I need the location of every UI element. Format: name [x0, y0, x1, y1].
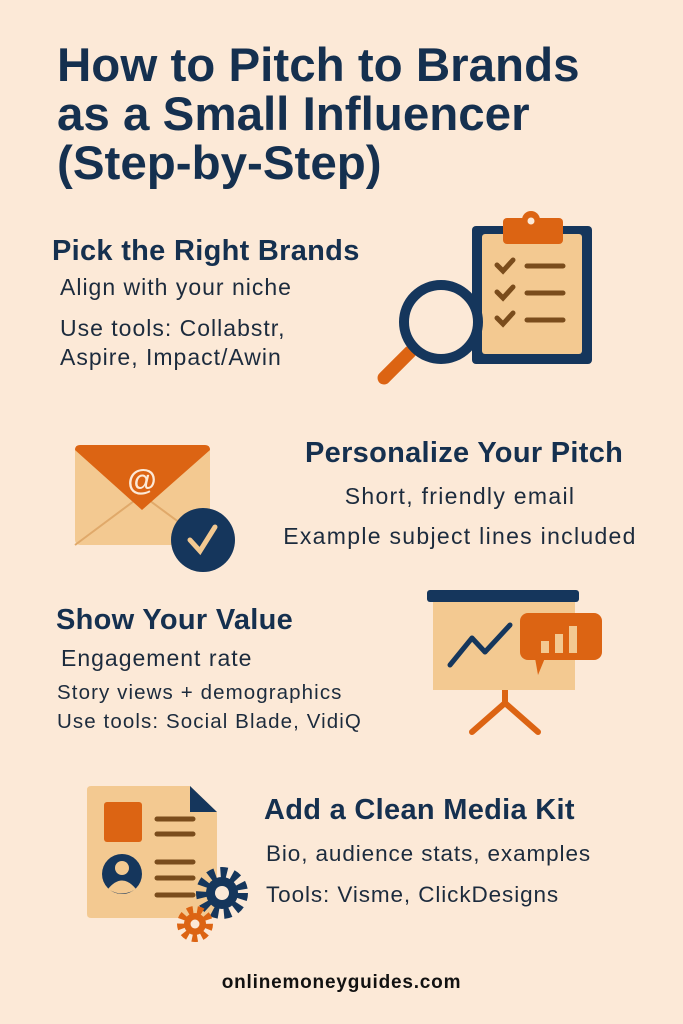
heading: pick brands: Pick the Right Brands — [52, 235, 360, 267]
text: media kit: Bio, audience stats, examples — [266, 841, 591, 866]
text: media kit — [266, 841, 591, 907]
heading: personalize: Personalize Your Pitch — [305, 437, 623, 469]
text: show value: Story views + demographics — [57, 681, 343, 704]
title: as a Small Influencer — [57, 88, 530, 141]
text: personalize: Short, friendly email — [345, 483, 575, 509]
text: pick brands — [60, 274, 292, 370]
icon: envelope with check — [75, 445, 235, 572]
footer: onlinemoneyguides.com — [222, 972, 461, 993]
icon: presentation board — [427, 590, 602, 732]
text: pick brands: Align with your niche Use tools: Collabstr, — [60, 274, 292, 341]
icon: clipboard and magnifier — [384, 211, 592, 378]
text: pick brands: Aspire, Impact/Awin — [60, 344, 282, 370]
title — [57, 39, 580, 190]
text: personalize: Example subject lines included — [283, 523, 637, 549]
heading: show value: Show Your Value — [56, 604, 293, 636]
text: personalize — [283, 483, 637, 549]
text: show value: Engagement rate — [61, 645, 252, 671]
icon: envelope with check: @ — [127, 464, 157, 497]
heading: media kit: Add a Clean Media Kit — [264, 794, 575, 826]
text: show value: Use tools: Social Blade, VidiQ — [57, 710, 362, 733]
text: media kit: Tools: Visme, ClickDesigns — [266, 882, 559, 907]
title: (Step-by-Step) — [57, 137, 382, 190]
icon: media kit document — [87, 786, 241, 937]
text: show value — [57, 645, 362, 733]
title: How to Pitch to Brands — [57, 39, 580, 92]
